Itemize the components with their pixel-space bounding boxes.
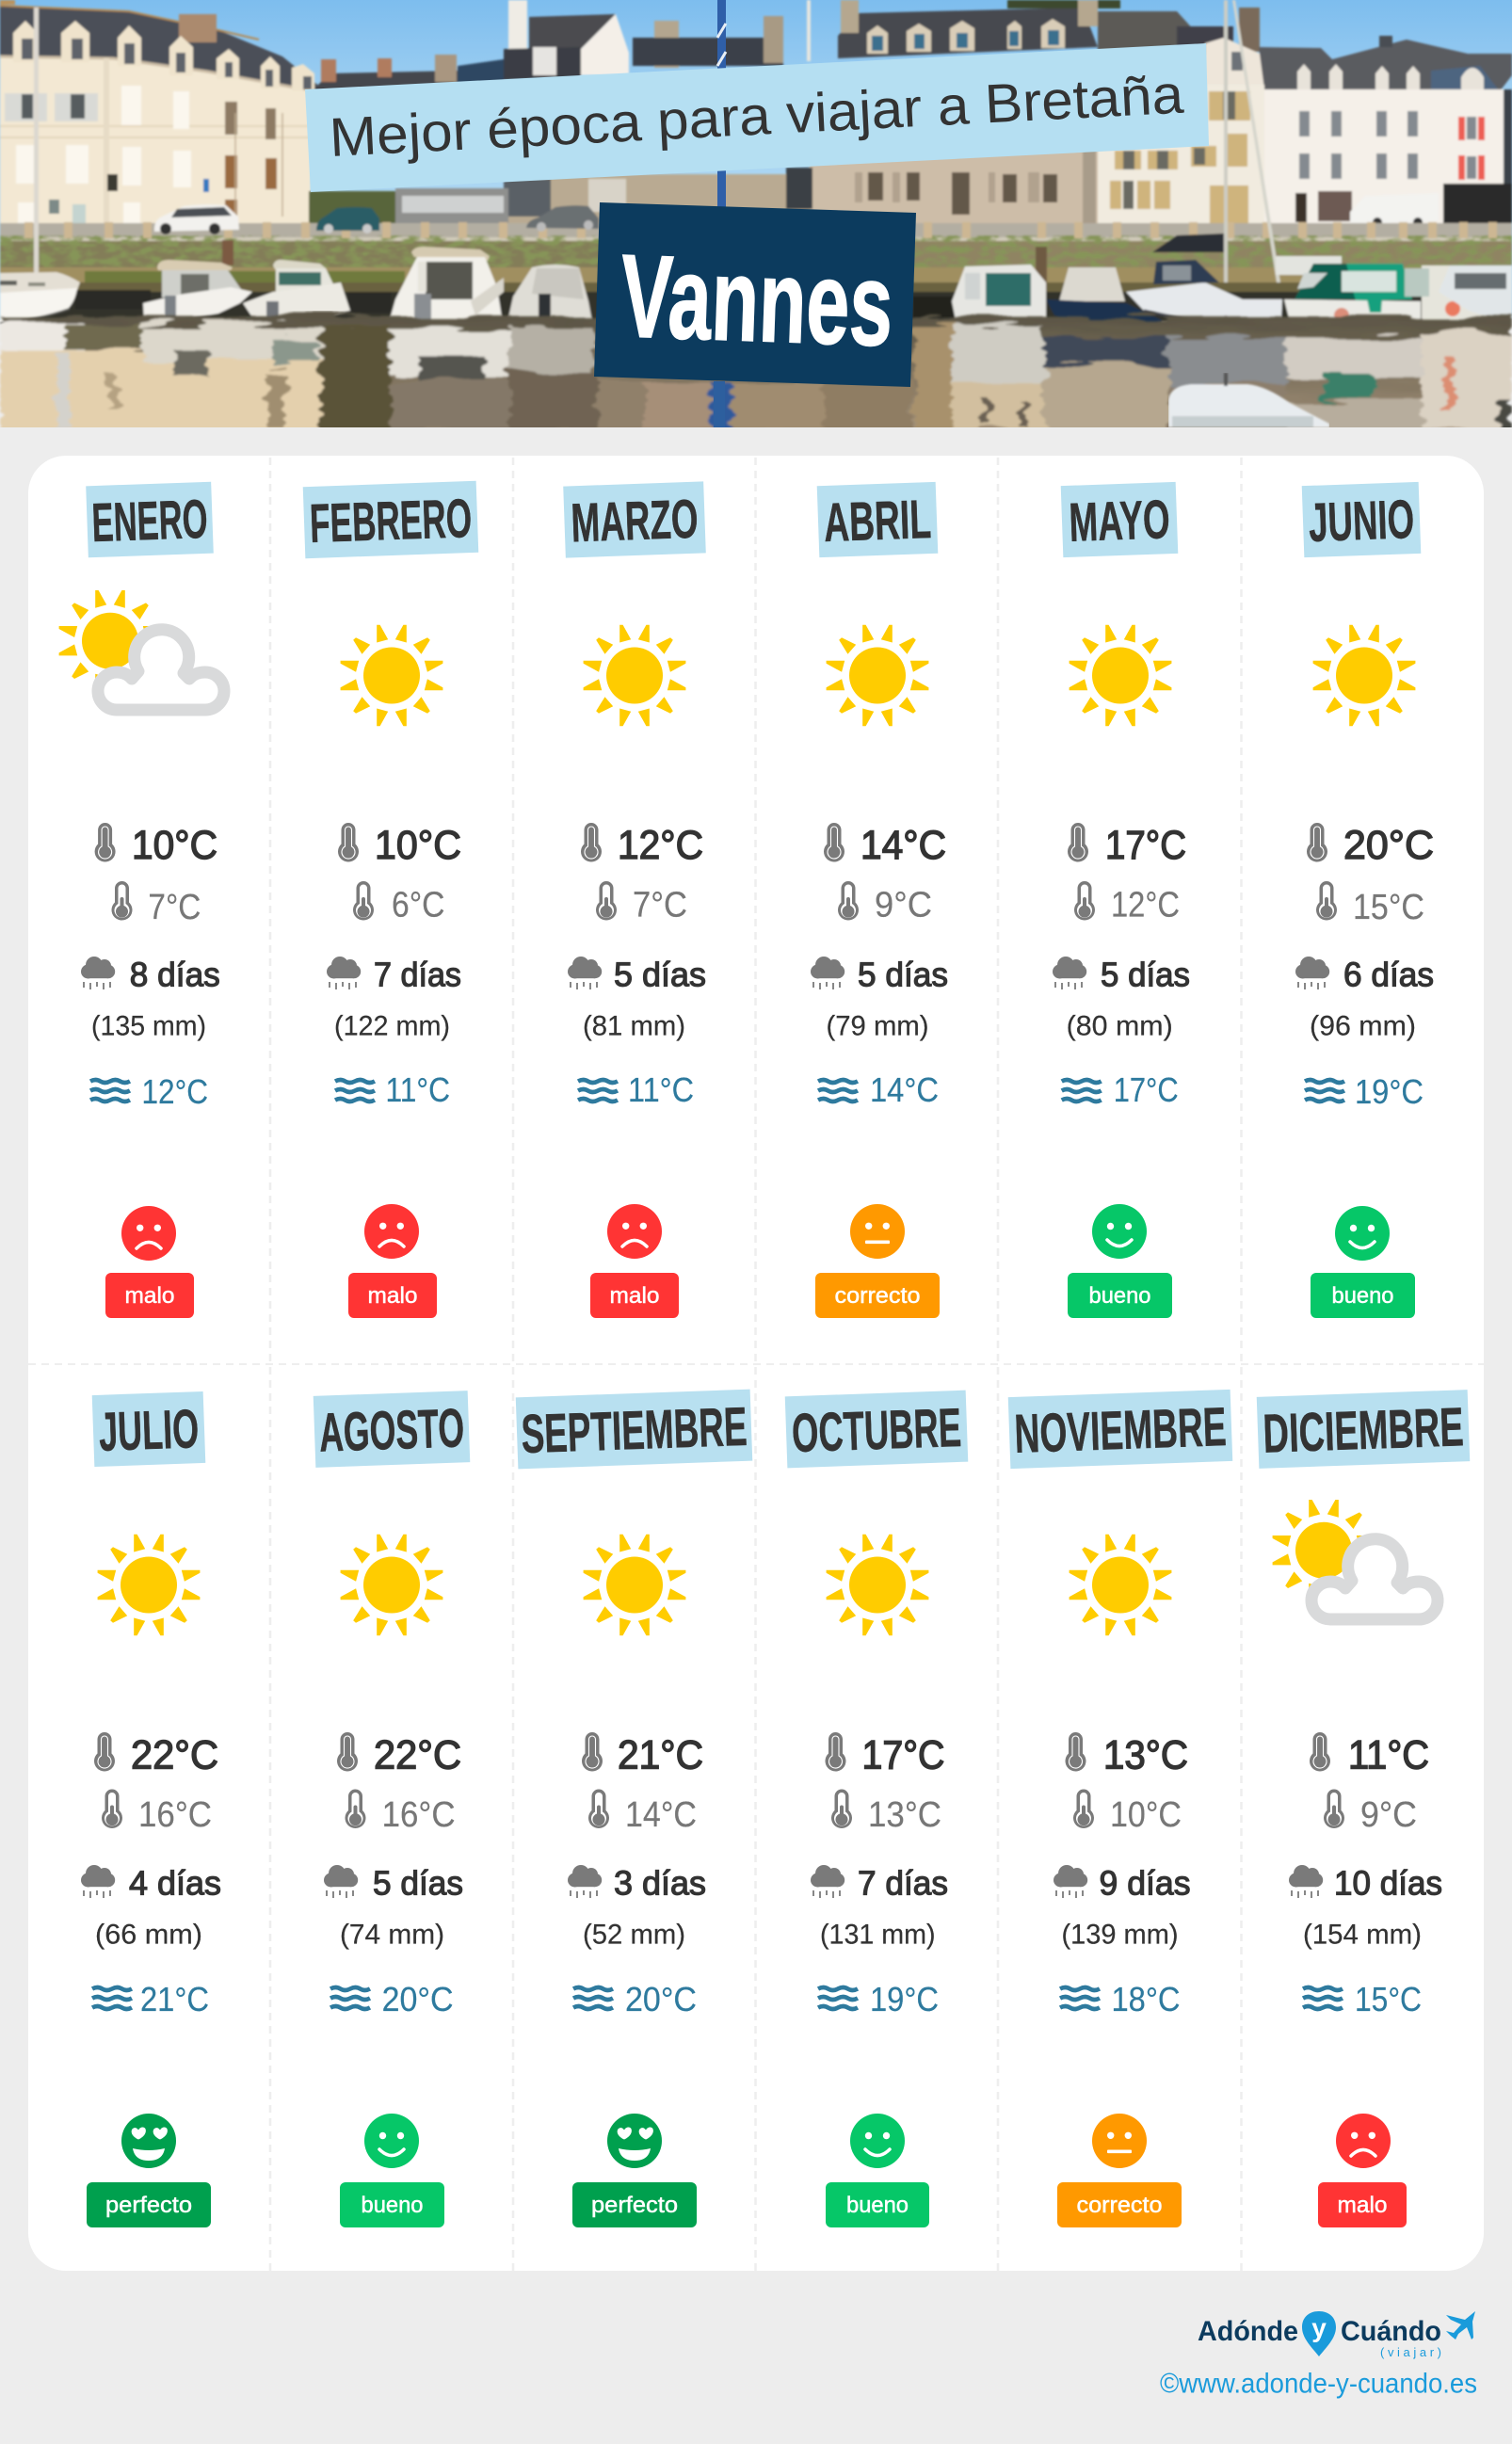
moored boats xyxy=(0,0,1512,339)
max temperature xyxy=(825,1732,945,1777)
month label xyxy=(1302,482,1421,557)
rainy days: 5 días xyxy=(1101,956,1190,994)
min temperature: 16°C xyxy=(138,1795,212,1835)
max temperature xyxy=(338,823,461,868)
month label: SEPTIEMBRE xyxy=(520,1396,748,1465)
month label xyxy=(303,481,478,558)
covered boat E xyxy=(507,265,593,327)
panel: mayo xyxy=(1053,482,1190,1318)
sea temperature xyxy=(818,1070,939,1109)
motorboat C xyxy=(273,260,326,269)
panel: enero xyxy=(59,482,224,1318)
title banner xyxy=(305,43,1209,192)
rating: bueno: bueno xyxy=(846,2193,909,2218)
icon: sun xyxy=(584,625,685,726)
sea temperature: 11°C xyxy=(386,1070,450,1109)
panel: junio xyxy=(1295,482,1434,1318)
beige buildings along the quay xyxy=(309,151,1098,226)
rainy days xyxy=(1289,1864,1442,1903)
rating: correcto: correcto xyxy=(1077,2193,1162,2218)
parked cars xyxy=(154,204,599,234)
rating: correcto xyxy=(1057,2114,1182,2227)
max temperature xyxy=(1068,823,1186,868)
max temperature: 11°C xyxy=(1348,1732,1429,1777)
rooftops in the middle xyxy=(315,0,1266,122)
rainy days xyxy=(568,1864,706,1903)
sea temperature: 19°C xyxy=(870,1980,939,2018)
month label: NOVIEMBRE xyxy=(1013,1396,1228,1465)
sea temperature: 15°C xyxy=(1355,1980,1422,2018)
motorboat B xyxy=(157,260,233,270)
icon: map pin xyxy=(1302,2311,1336,2356)
icon: plane xyxy=(1446,2311,1475,2339)
icon: sun xyxy=(827,625,928,726)
min temperature: 16°C xyxy=(382,1795,456,1835)
foreground boat xyxy=(1168,373,1329,427)
boat J xyxy=(1420,264,1488,322)
sailboat H xyxy=(1124,281,1284,319)
quay road, wall and bollards xyxy=(0,222,1512,322)
min temperature: 14°C xyxy=(625,1795,697,1835)
rainfall: (52 mm) xyxy=(583,1920,685,1951)
rating: malo: malo xyxy=(124,1283,175,1309)
rating: malo: malo xyxy=(367,1283,418,1309)
rating: correcto xyxy=(815,1204,940,1318)
max temperature: 21°C xyxy=(618,1732,703,1777)
right-hand white houses xyxy=(1259,36,1512,227)
rating: bueno: bueno xyxy=(1331,1283,1393,1309)
max temperature: 10°C xyxy=(132,823,217,868)
sea temperature xyxy=(1305,1072,1424,1111)
rainy days: 7 días xyxy=(374,956,461,994)
max temperature: 10°C xyxy=(375,823,461,868)
rainfall: (79 mm) xyxy=(827,1011,928,1042)
month label: FEBRERO xyxy=(309,488,473,555)
month label xyxy=(1061,482,1178,557)
panel: febrero xyxy=(303,481,478,1318)
rainy days xyxy=(327,956,461,994)
boat F xyxy=(952,265,1046,327)
icon: sun xyxy=(1070,1535,1171,1635)
month label xyxy=(314,1391,470,1468)
logo: Adónde y Cuándo xyxy=(1198,2311,1475,2359)
sea temperature xyxy=(92,1980,209,2018)
sea temperature xyxy=(335,1070,450,1109)
sea temperature xyxy=(1060,1980,1181,2018)
sea temperature: 18°C xyxy=(1111,1980,1181,2018)
icon: sun and cloud xyxy=(1273,1500,1438,1619)
min temperature xyxy=(596,881,687,925)
icon: sun xyxy=(341,625,442,726)
rating: bueno xyxy=(1311,1206,1415,1318)
rainy days xyxy=(568,956,706,994)
icon: map pin: y xyxy=(1311,2313,1327,2342)
max temperature: 17°C xyxy=(862,1732,945,1777)
city name: Vannes xyxy=(619,231,895,371)
min temperature xyxy=(1316,881,1424,927)
rainfall: (135 mm) xyxy=(91,1011,206,1042)
month label xyxy=(785,1391,968,1468)
sea temperature: 11°C xyxy=(628,1070,694,1109)
max temperature: 22°C xyxy=(131,1732,218,1777)
left stone building xyxy=(0,0,321,235)
sea temperature: 20°C xyxy=(382,1980,454,2018)
max temperature: 20°C xyxy=(1343,823,1434,868)
rainfall: (154 mm) xyxy=(1303,1920,1422,1951)
sea temperature xyxy=(1303,1980,1422,2018)
month label xyxy=(516,1390,752,1469)
rainy days xyxy=(811,1864,948,1903)
max temperature xyxy=(581,823,703,868)
icon: sun xyxy=(98,1535,200,1635)
rainy days: 7 días xyxy=(858,1864,948,1903)
month label xyxy=(563,481,706,558)
rainfall: (66 mm) xyxy=(95,1920,202,1951)
rainfall: (139 mm) xyxy=(1062,1920,1179,1951)
panel: abril xyxy=(811,482,948,1318)
rating: bueno xyxy=(340,2114,444,2227)
min temperature: 9°C xyxy=(875,886,932,925)
rainy days: 6 días xyxy=(1343,956,1434,994)
max temperature xyxy=(582,1732,703,1777)
min temperature: 13°C xyxy=(868,1795,941,1835)
rating: malo: malo xyxy=(610,1283,659,1309)
sea temperature: 17°C xyxy=(1114,1070,1179,1109)
panel: julio xyxy=(81,1391,221,2227)
rainy days xyxy=(1053,956,1190,994)
rainy days xyxy=(811,956,948,994)
min temperature: 7°C xyxy=(148,888,201,927)
rainy days xyxy=(1054,1864,1190,1903)
min temperature xyxy=(345,1789,456,1835)
panel: agosto xyxy=(314,1391,470,2227)
rainy days xyxy=(1295,956,1434,994)
icon: sun and cloud xyxy=(59,590,224,710)
sea temperature xyxy=(573,1980,697,2018)
month label: JUNIO xyxy=(1308,489,1415,554)
sailboat, far left xyxy=(34,8,39,273)
max temperature xyxy=(94,1732,218,1777)
max temperature: 22°C xyxy=(374,1732,461,1777)
icon: sun xyxy=(1070,625,1171,726)
rainy days: 5 días xyxy=(373,1864,463,1903)
rainfall: (131 mm) xyxy=(820,1920,936,1951)
rainy days: 3 días xyxy=(614,1864,706,1903)
min temperature: 7°C xyxy=(633,886,687,925)
logo: Adónde y Cuándo: Cuándo xyxy=(1341,2316,1441,2347)
title text: Mejor época para viajar a Bretaña xyxy=(328,64,1185,169)
min temperature: 10°C xyxy=(1110,1795,1182,1835)
min temperature xyxy=(1073,1789,1182,1835)
rainy days xyxy=(81,956,220,994)
rating: perfecto: perfecto xyxy=(591,2193,678,2218)
min temperature xyxy=(102,1789,212,1835)
max temperature xyxy=(824,823,946,868)
logo: Adónde y Cuándo: (viajar) xyxy=(1380,2345,1441,2359)
sea temperature: 20°C xyxy=(625,1980,697,2018)
rainy days: 4 días xyxy=(129,1864,221,1903)
rating: malo: malo xyxy=(1337,2193,1388,2218)
panel: diciembre xyxy=(1257,1390,1470,2227)
rainy days: 5 días xyxy=(614,956,706,994)
rating: bueno: bueno xyxy=(362,2193,424,2218)
month label xyxy=(817,482,938,557)
max temperature xyxy=(1066,1732,1188,1777)
covered dark-hull boat G xyxy=(1059,267,1125,301)
month label: ABRIL xyxy=(823,489,932,554)
rainy days xyxy=(324,1864,463,1903)
month label: AGOSTO xyxy=(318,1397,465,1464)
sea temperature xyxy=(818,1980,939,2018)
icon: sun xyxy=(827,1535,928,1635)
min temperature xyxy=(1324,1789,1417,1835)
calendar card xyxy=(28,456,1484,2271)
rating: perfecto xyxy=(572,2114,697,2227)
min temperature xyxy=(111,881,201,927)
month label: MARZO xyxy=(570,489,700,554)
sea temperature xyxy=(330,1980,454,2018)
sea temperature xyxy=(1062,1070,1179,1109)
rating: perfecto: perfecto xyxy=(105,2193,192,2218)
rating: bueno xyxy=(826,2114,929,2227)
rainy days: 8 días xyxy=(130,956,220,994)
month label xyxy=(92,1391,205,1467)
rating: malo xyxy=(348,1204,437,1318)
striped flagpole xyxy=(714,0,726,427)
icon: sun xyxy=(341,1535,442,1635)
panel: noviembre xyxy=(1008,1390,1232,2227)
sea temperature: 19°C xyxy=(1355,1072,1424,1111)
month label xyxy=(1008,1390,1232,1469)
min temperature: 12°C xyxy=(1111,886,1180,925)
rainfall: (122 mm) xyxy=(334,1011,450,1042)
rating: perfecto xyxy=(87,2114,211,2227)
sea temperature: 14°C xyxy=(870,1070,939,1109)
max temperature xyxy=(1310,1732,1429,1777)
rating: bueno: bueno xyxy=(1088,1283,1150,1309)
header photo: harbour of Vannes xyxy=(0,0,1512,439)
month label xyxy=(86,482,214,557)
rainy days xyxy=(81,1864,221,1903)
month label: ENERO xyxy=(90,489,209,554)
motorboat D xyxy=(411,247,490,261)
min temperature xyxy=(353,881,444,925)
rating: bueno xyxy=(1068,1204,1172,1318)
green-canopy boat I xyxy=(1276,256,1342,275)
min temperature: 15°C xyxy=(1353,888,1424,927)
min temperature: 9°C xyxy=(1360,1795,1417,1835)
harbour water and reflections xyxy=(0,316,1512,439)
icon: sun xyxy=(584,1535,685,1635)
min temperature xyxy=(838,881,932,925)
sea temperature: 21°C xyxy=(140,1980,209,2018)
rainfall: (96 mm) xyxy=(1310,1011,1416,1042)
max temperature xyxy=(337,1732,461,1777)
rainy days: 5 días xyxy=(858,956,948,994)
rating: correcto: correcto xyxy=(834,1283,921,1309)
sea temperature xyxy=(90,1072,208,1111)
panel: septiembre xyxy=(516,1390,752,2227)
min temperature xyxy=(588,1789,697,1835)
max temperature xyxy=(95,823,217,868)
month label: OCTUBRE xyxy=(791,1397,962,1464)
city banner xyxy=(594,202,916,387)
rating: malo xyxy=(1318,2114,1407,2227)
month label: MAYO xyxy=(1068,489,1171,554)
rating: malo xyxy=(105,1206,194,1318)
min temperature xyxy=(831,1789,941,1835)
month label: JULIO xyxy=(98,1398,200,1463)
rainy days: 10 días xyxy=(1334,1864,1442,1903)
max temperature: 12°C xyxy=(618,823,703,868)
website credit: ©www.adonde-y-cuando.es xyxy=(1160,2369,1477,2400)
cream building with tan shutters xyxy=(1098,85,1264,226)
max temperature: 14°C xyxy=(861,823,946,868)
icon: sun xyxy=(1313,625,1415,726)
rainfall: (81 mm) xyxy=(583,1011,685,1042)
min temperature xyxy=(1074,881,1180,925)
sea temperature xyxy=(578,1070,694,1109)
rating: malo xyxy=(590,1204,679,1318)
sea temperature: 12°C xyxy=(141,1072,208,1111)
rainy days: 9 días xyxy=(1100,1864,1190,1903)
min temperature: 6°C xyxy=(392,886,444,925)
boat K xyxy=(1439,265,1512,325)
logo: Adónde y Cuándo: Adónde xyxy=(1198,2316,1298,2347)
max temperature: 17°C xyxy=(1105,823,1186,868)
panel: octubre xyxy=(785,1391,968,2227)
rainfall: (74 mm) xyxy=(340,1920,444,1951)
rainfall: (80 mm) xyxy=(1067,1011,1173,1042)
panel: marzo xyxy=(563,481,706,1318)
max temperature: 13°C xyxy=(1103,1732,1188,1777)
